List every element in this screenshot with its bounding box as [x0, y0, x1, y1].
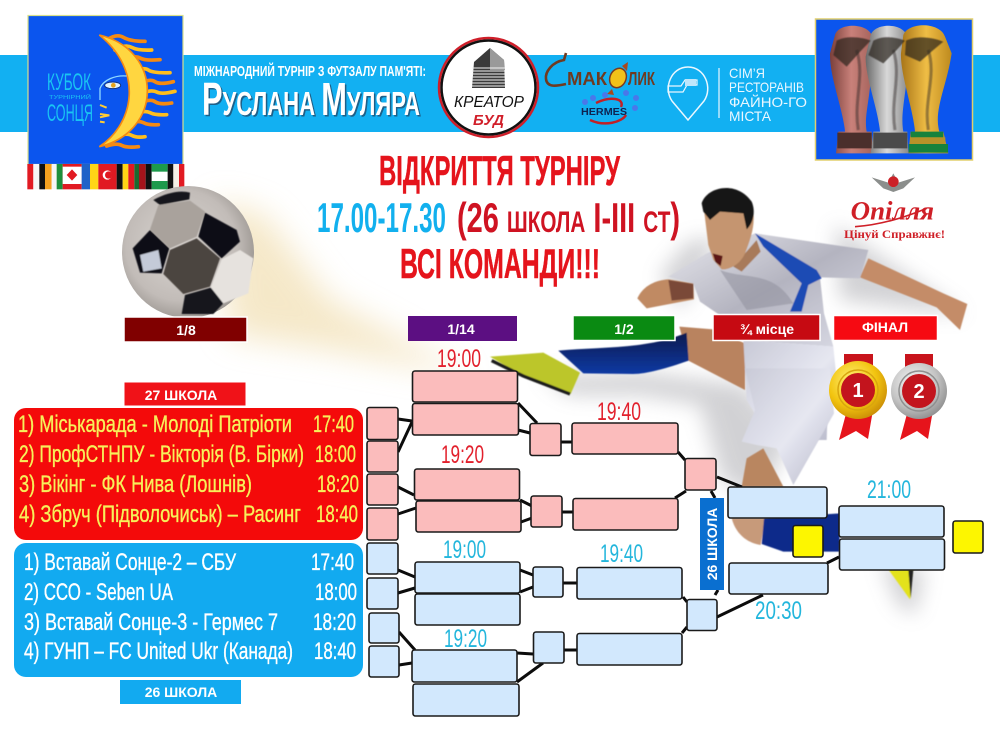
- slogan: Цінуй Справжнє!: [844, 229, 945, 241]
- player shadow: [540, 225, 965, 615]
- logo: Hermes: [581, 90, 639, 123]
- candy: [607, 66, 629, 90]
- label 1/8: [124, 317, 247, 342]
- match times: [437, 345, 911, 653]
- label 1/8: 1/8: [176, 322, 196, 338]
- stage labels: [124, 314, 938, 342]
- match times: 21:00: [867, 476, 911, 504]
- logo: Hermes: HERMES: [581, 107, 627, 118]
- label final: [834, 316, 938, 340]
- restaurant text: СІМ’Я: [729, 65, 765, 81]
- group label: 27 школа: 27 ШКОЛА: [145, 387, 217, 403]
- silver medal: 2: [913, 381, 925, 403]
- shirt fold: [720, 270, 793, 310]
- match times: 19:20: [441, 441, 484, 469]
- face: [704, 196, 754, 269]
- label 1/2: [573, 316, 675, 340]
- bracket: quarter-final winner slots: [530, 424, 564, 663]
- logo sun: [99, 35, 175, 147]
- fixture 1: 1) Вставай Сонце-2 – СБУ: [24, 549, 237, 576]
- restaurant text: [729, 65, 807, 124]
- shoe lower: [888, 569, 913, 599]
- label 1/4: [408, 316, 517, 341]
- fixture 2: 18:00: [315, 579, 357, 606]
- label final: ФІНАЛ: [862, 319, 908, 335]
- match times: 19:40: [597, 398, 641, 426]
- silver trophy: [866, 26, 908, 153]
- bracket: round 1/8 slots: [367, 408, 399, 677]
- name shadow: РУСЛАНА МУЛЯРА: [204, 74, 422, 126]
- company name: КРЕАТОР: [454, 94, 524, 111]
- arm left: [637, 279, 694, 308]
- shorts lower: [742, 368, 834, 485]
- fixture 2: 2) ПрофСТНПУ - Вікторія (В. Бірки): [19, 441, 304, 468]
- wordmark right: ЛИК: [628, 69, 656, 89]
- restaurant text: ФАЙНО-ГО: [729, 93, 807, 110]
- banner heading: [194, 62, 426, 126]
- logo: Смаколик: [546, 53, 656, 95]
- name: РУСЛАНА МУЛЯРА: [202, 73, 420, 125]
- logo: Креатор Буд: [439, 38, 538, 137]
- logo text: Сонця: СОНЦЯ: [47, 100, 93, 127]
- fixture 1: 17:40: [313, 411, 354, 438]
- knee: [732, 518, 765, 545]
- logo: Кубок Сонця: [28, 16, 183, 164]
- neck: [733, 240, 761, 272]
- gold medal: [829, 354, 887, 440]
- bracket connectors: [398, 403, 839, 682]
- fixture 1: 1) Міськарада - Молоді Патріоти: [18, 411, 292, 438]
- company suffix: БУД: [473, 112, 504, 129]
- arm right: [860, 258, 967, 330]
- fixture 3: 3) Вставай Сонце-3 - Гермес 7: [24, 609, 278, 636]
- restaurant text: МІСТА: [729, 108, 772, 124]
- subtitle: МІЖНАРОДНИЙ ТУРНІР З ФУТЗАЛУ ПАМ'ЯТІ:: [194, 62, 426, 80]
- bracket: semi-final winner slots: [685, 458, 717, 630]
- fixture 4: 18:40: [316, 501, 358, 528]
- pin icon: [668, 67, 708, 120]
- silver medal: [891, 354, 947, 440]
- label third place: [713, 314, 820, 340]
- line 2 time: 17.00-17.30: [317, 194, 446, 241]
- panel: trophies: [816, 19, 972, 160]
- shoe: [490, 353, 580, 394]
- label 1/2: 1/2: [614, 321, 634, 337]
- heading: tournament opening: [317, 147, 680, 287]
- flags strip: [27, 164, 184, 189]
- gold medal: 1: [852, 380, 864, 402]
- fixture 2: [24, 579, 357, 606]
- fixture 2: 2) ССО - Seben UA: [24, 579, 173, 606]
- logo: Сім'я ресторанів: [668, 65, 807, 124]
- player figure: [490, 188, 967, 615]
- thigh: [742, 448, 783, 487]
- fixture 3: 18:20: [313, 609, 356, 636]
- shirt blue panel: [755, 233, 822, 312]
- top blue banner: [0, 55, 1000, 132]
- match times: 19:00: [443, 536, 486, 564]
- match times: 19:00: [437, 345, 481, 373]
- label 1/4: 1/14: [447, 321, 475, 337]
- shirt: [668, 233, 868, 347]
- logo: Опілля: [844, 173, 945, 241]
- bracket: quarter-final slots: [412, 371, 521, 716]
- hair: [702, 188, 754, 229]
- yellow winner squares: [793, 521, 983, 557]
- group label: 26 школа: [120, 680, 241, 704]
- bracket: semi-final slots: [572, 423, 682, 665]
- lower sock: [762, 513, 840, 552]
- vertical label: 26 школа: 26 ШКОЛА: [704, 508, 720, 580]
- logo text: турнір: ТУРНІРНИЙ: [49, 93, 92, 101]
- fixture 1: 17:40: [311, 549, 354, 576]
- fixture 3: 18:20: [317, 471, 359, 498]
- logo text: Кубок: КУБОК: [47, 69, 91, 96]
- gold trophy: [901, 25, 952, 153]
- copper trophy: [830, 26, 873, 153]
- raised leg sock: [558, 333, 689, 374]
- fixture 4: 18:40: [314, 638, 356, 665]
- match times: 19:20: [444, 625, 487, 653]
- line 1: ВІДКРИТТЯ ТУРНІРУ: [379, 147, 620, 194]
- label third place: ¾ місце: [740, 321, 794, 337]
- bracket: third place slots: [728, 487, 828, 594]
- raised leg skin: [679, 327, 745, 390]
- bracket: final slots: [839, 506, 944, 570]
- match times: 20:30: [755, 597, 802, 625]
- match times: 19:40: [600, 540, 643, 568]
- ball motion trail: [215, 200, 470, 375]
- soccer ball: [122, 186, 254, 318]
- shorts: [743, 340, 837, 440]
- line 2 place: (26 ШКОЛА І-ІІІ СТ): [457, 194, 680, 241]
- group label: 27 школа: [124, 382, 246, 406]
- fixture 4: 4) ГУНП – FC United Ukr (Канада): [24, 638, 293, 665]
- panel: red fixtures: [14, 408, 363, 540]
- restaurant text: РЕСТОРАНІВ: [729, 79, 804, 95]
- fixture 4: 4) Збруч (Підволочиськ) – Расинг: [19, 501, 301, 528]
- red side slots: [367, 408, 398, 540]
- line 3: ВСІ КОМАНДИ!!!: [400, 240, 600, 287]
- group label: 26 школа: 26 ШКОЛА: [145, 684, 217, 700]
- vertical label: 26 школа: [700, 498, 724, 590]
- wordmark left: МАК: [567, 69, 608, 89]
- fixture 2: 18:00: [315, 441, 356, 468]
- brand text: Опілля: [851, 196, 934, 225]
- fixture 3: 3) Вікінг - ФК Нива (Лошнів): [19, 471, 252, 498]
- building: [472, 48, 505, 88]
- panel: blue fixtures: [14, 543, 363, 677]
- mouth: [713, 253, 723, 266]
- blue side slots: [367, 543, 399, 677]
- crest: [872, 173, 915, 192]
